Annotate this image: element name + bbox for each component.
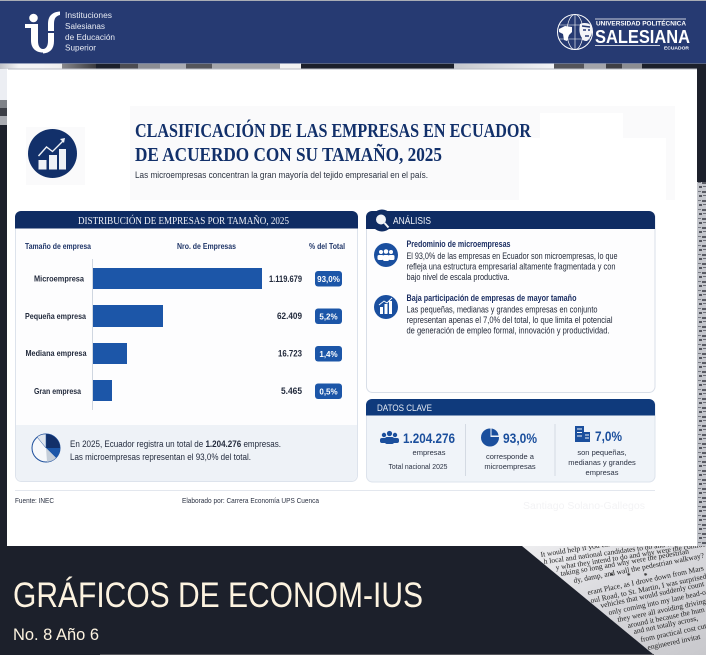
icon: building	[575, 426, 590, 442]
logo: Universidad Politécnica Salesiana: SALESIANA	[595, 27, 690, 47]
logo: Instituciones Salesianas: Superior	[65, 44, 96, 52]
panel: analysis	[366, 210, 655, 392]
stat: microenterprise share: corresponde a	[486, 452, 535, 461]
row: Gran empresa: Gran empresa	[34, 386, 81, 396]
analysis item: microenterprises	[406, 239, 618, 282]
analysis item: microenterprises: bajo nivel de escala productiva.	[406, 272, 510, 282]
newspaper corner: taking so long and why were the pedestrian	[560, 546, 690, 578]
summary callout	[16, 425, 357, 481]
newspaper strip right	[697, 182, 706, 546]
analysis item: microenterprises: El 93,0% de las empresas en Ecuador son microempresas, lo que	[406, 251, 618, 261]
panel: distribution by size	[15, 211, 358, 482]
logo: Instituciones Salesianas: de Educación	[65, 33, 115, 42]
stat: remaining share	[568, 426, 636, 477]
newspaper corner: It would help if you can	[540, 539, 613, 559]
bar chart	[25, 268, 342, 401]
stat: remaining share: 7,0%	[595, 429, 622, 444]
column headers: % del Total	[309, 241, 345, 251]
row: Gran empresa: 0,5%	[319, 388, 338, 396]
newspaper corner: * * *	[610, 571, 648, 580]
logo: Universidad Politécnica Salesiana	[558, 14, 690, 50]
newspaper corner: dy, damp, and wall the pedestrian walkway?	[573, 551, 705, 585]
header bar	[0, 0, 706, 64]
stat: remaining share: son pequeñas,	[577, 448, 627, 457]
icon: growth chart	[28, 129, 77, 178]
analysis item: microenterprises: refleja una estructura empresarial altamente fragmentada y con	[406, 262, 616, 272]
analysis item: larger firms: de generación de empleo formal, innovación y productividad.	[406, 326, 610, 336]
newspaper corner: erant Place, as I drove down from Mars	[587, 563, 705, 597]
newspaper corner: y what they intend to do and why were the contract	[555, 539, 706, 572]
stat: microenterprise share: 93,0%	[503, 431, 537, 446]
newspaper corner: around it because the hum	[627, 605, 706, 630]
subtitle: Las microempresas concentran la gran mayoría del tejido empresarial en el país.	[135, 170, 428, 180]
column headers	[25, 241, 345, 251]
analysis item: larger firms: Las pequeñas, medianas y grandes empresas en conjunto	[406, 304, 598, 314]
stat: total companies: 1.204.276	[403, 431, 455, 446]
row: Gran empresa	[34, 380, 342, 401]
analysis item: larger firms: representan apenas el 7,0% del total, lo que limita el potencial	[406, 315, 612, 325]
row: Mediana empresa: 16.723	[278, 348, 302, 358]
panel: key data	[366, 399, 655, 482]
row: Pequeña empresa	[25, 305, 342, 327]
key data heading	[366, 399, 655, 416]
left edge photo remnants	[0, 63, 7, 125]
newspaper corner: vehicles that would suddenly count	[600, 579, 706, 610]
row: Microempresa: 93,0%	[317, 275, 340, 284]
logo: Instituciones Salesianas	[25, 11, 115, 54]
newspaper corner: engineered invitat	[647, 632, 702, 652]
row: Pequeña empresa: Pequeña empresa	[25, 311, 86, 321]
analysis heading	[366, 210, 655, 232]
row: Mediana empresa: 1,4%	[319, 350, 338, 359]
credit: Elaborado por: Carrera Economía UPS Cuenca	[182, 496, 320, 505]
icon: people	[374, 243, 398, 267]
issue number: No. 8 Año 6	[13, 625, 99, 644]
icon: pie chart	[32, 434, 60, 462]
row: Mediana empresa	[26, 343, 342, 364]
row: Microempresa	[34, 268, 342, 289]
stat: remaining share: empresas	[586, 468, 619, 477]
row: Pequeña empresa: 5,2%	[319, 312, 338, 322]
summary callout: Las microempresas representan el 93,0% del total.	[70, 452, 251, 462]
icon: small chart	[374, 295, 398, 319]
panel heading	[15, 211, 358, 228]
stat: microenterprise share	[481, 428, 537, 471]
panel heading: DISTRIBUCIÓN DE EMPRESAS POR TAMAÑO, 2025	[78, 215, 289, 227]
logo: Universidad Politécnica Salesiana: ECUADOR	[664, 46, 690, 50]
title: DE ACUERDO CON SU TAMAÑO, 2025	[135, 143, 442, 166]
stat: microenterprise share: microempresas	[484, 462, 536, 471]
row: Microempresa: 1.119.679	[269, 274, 302, 284]
summary callout: En 2025, Ecuador registra un total de 1.204.276 empresas.	[70, 439, 281, 449]
publication title: GRÁFICOS DE ECONOM-IUS	[13, 576, 423, 615]
row: Microempresa: Microempresa	[34, 274, 84, 284]
row: Mediana empresa: Mediana empresa	[26, 348, 87, 358]
row: Pequeña empresa: 62.409	[277, 311, 302, 321]
newspaper corner: oul Road, to St. Martin, I was surprised	[590, 572, 706, 605]
white content panel	[7, 68, 697, 546]
title: CLASIFICACIÓN DE LAS EMPRESAS EN ECUADOR	[135, 118, 531, 142]
newspaper corner: they were all avoiding driving	[617, 596, 706, 624]
logo: Universidad Politécnica Salesiana: UNIVERSIDAD POLITÉCNICA	[596, 18, 686, 28]
column headers: Nro. de Empresas	[177, 241, 236, 251]
analysis item: microenterprises: Predominio de microempresas	[406, 239, 510, 249]
newspaper corner: h local and national candidates to do and why were	[543, 536, 697, 566]
icon: people group	[380, 431, 399, 444]
photo strip under header	[0, 63, 642, 69]
analysis item: larger firms	[406, 293, 612, 336]
stat: total companies: empresas	[413, 448, 446, 457]
column headers: Tamaño de empresa	[25, 241, 91, 251]
title	[135, 118, 531, 166]
newspaper corner: and not totally across,	[633, 613, 699, 636]
analysis item: larger firms: Baja participación de empresas de mayor tamaño	[406, 293, 577, 303]
icon: pie	[481, 428, 500, 446]
logo: Instituciones Salesianas: Salesianas	[65, 22, 105, 31]
stat: remaining share: medianas y grandes	[568, 458, 636, 467]
source: Fuente: INEC	[15, 496, 54, 505]
key data heading: DATOS CLAVE	[377, 403, 432, 413]
analysis heading: ANÁLISIS	[393, 214, 431, 227]
newspaper corner	[522, 546, 706, 655]
row: Gran empresa: 5.465	[281, 386, 302, 396]
logo: Instituciones Salesianas: Instituciones	[65, 11, 112, 20]
stat: total companies: Total nacional 2025	[388, 462, 448, 471]
stat: total companies	[380, 431, 455, 471]
newspaper corner: from practical cost cut	[640, 621, 706, 644]
signature watermark: Santiago Solano-Gallegos	[523, 501, 645, 512]
